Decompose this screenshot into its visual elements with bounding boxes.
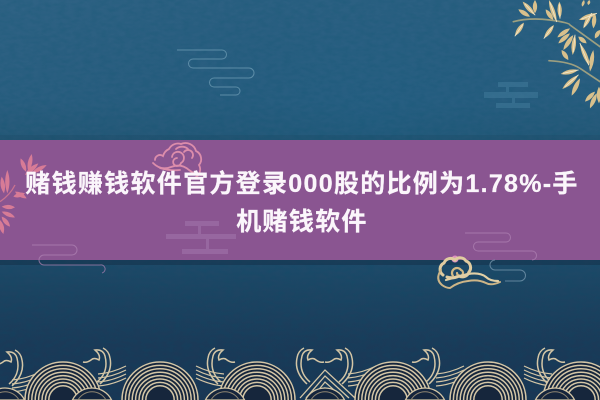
title text: 机赌钱软件 (236, 208, 368, 236)
title text: 赌钱赚钱软件官方登录000股的比例为1.78%-手 (25, 170, 579, 198)
panel: purple title band (0, 140, 600, 260)
title text (25, 170, 579, 236)
